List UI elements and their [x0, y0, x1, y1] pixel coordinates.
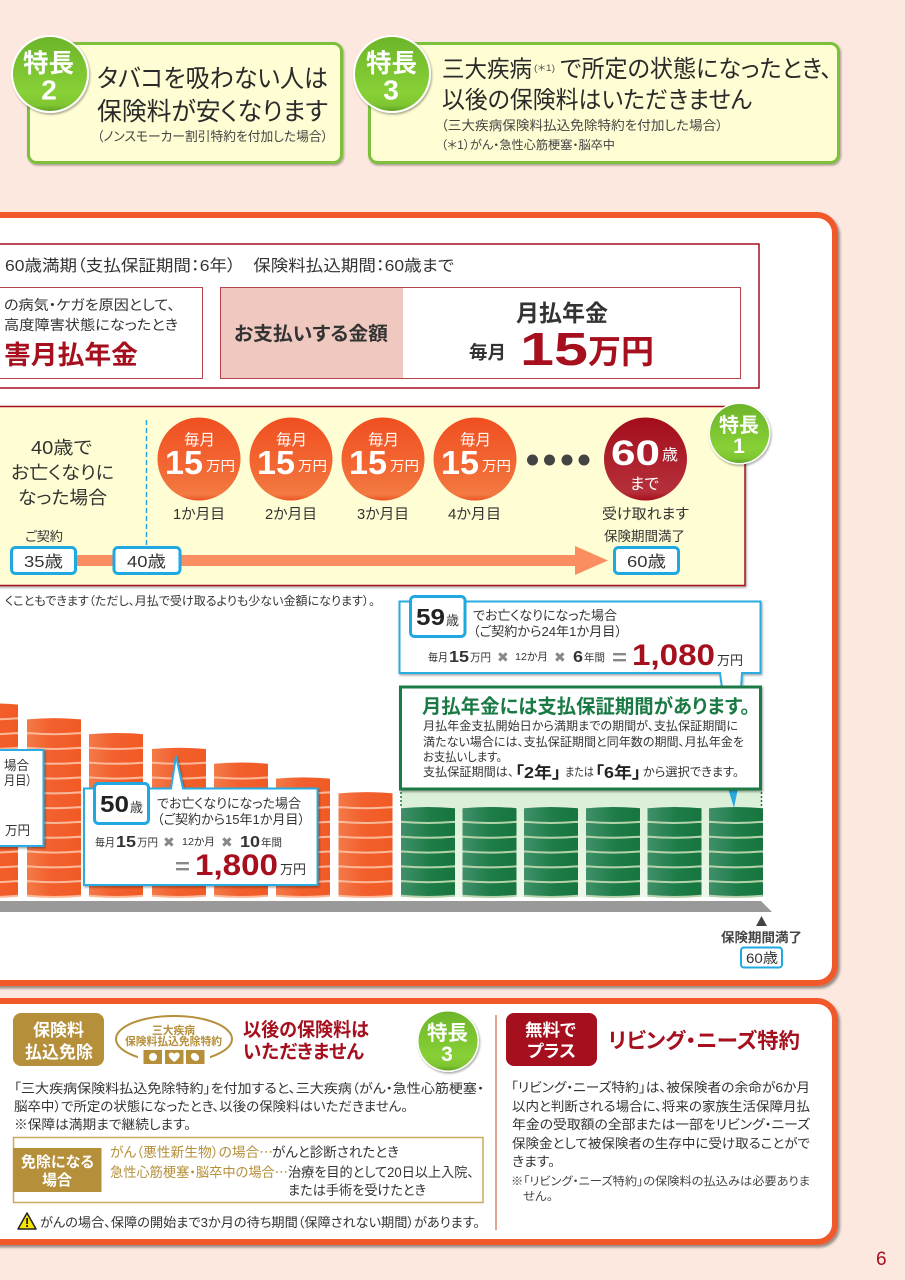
text: lump sum note: くこともできます（ただし、月払で受け取るよりも少ない金額になります）。 [5, 594, 375, 608]
panel: payment amount: 万円 [588, 333, 654, 370]
text: formula 50: 10 [240, 834, 260, 851]
callout: age 59 [400, 596, 760, 688]
heading: feature 3 text: 以後の保険料はいただきません [442, 87, 752, 114]
icon: coin month 2: 毎月 [276, 431, 307, 449]
text: formula 59: 6 [573, 649, 583, 666]
text: waiver description [14, 1081, 484, 1132]
orange stacks [0, 703, 392, 897]
icon: coin month 1 [158, 418, 240, 500]
icon: badge feature 3 [353, 35, 431, 113]
panel: guarantee period [400, 687, 760, 808]
label: age 50 box [94, 784, 148, 824]
callout: partial left case: 月目） [4, 773, 32, 788]
text: formula 50: 15 [116, 834, 136, 851]
callout: partial left case: 万円 [5, 823, 30, 838]
text: month labels: 1か月目 [173, 506, 225, 523]
text: scenario: 40歳で [31, 438, 92, 458]
heading: premium waiver: 以後の保険料は [243, 1019, 369, 1041]
icon: coin month 3: 万円 [390, 458, 419, 474]
icon: coin month 2 [250, 418, 332, 500]
badge: free add-on: 無料で [525, 1021, 576, 1040]
label: age 59 box: 歳 [446, 613, 459, 628]
icon: until age 60: まで [630, 476, 659, 493]
panel: guarantee period: から選択できます。 [643, 765, 739, 779]
icon: coin month 3 [342, 418, 424, 500]
panel: waiver conditions: 治療を目的として20日以上入院、 [288, 1165, 474, 1180]
icon: until age 60 [604, 418, 687, 500]
icon: badge feature 3: 特長 [427, 1022, 468, 1045]
panel: living needs rider [506, 1013, 811, 1203]
icon: rider logo oval [116, 1016, 232, 1066]
heading: premium waiver: いただきません [243, 1041, 365, 1063]
callout: age 59: でお亡くなりになった場合 [473, 608, 617, 623]
heading: feature 2 text [97, 65, 328, 144]
label: age 59 box [410, 596, 465, 636]
panel: payment amount: 15 [520, 323, 588, 375]
text: total 1800: 1,800 [195, 849, 278, 882]
heading: feature 2 text: タバコを吸わない人は [97, 65, 328, 93]
callout: age 50: （ご契約から15年1か月目） [157, 812, 305, 827]
icon: coin month 4: 15 [441, 444, 479, 481]
panel: payment timeline [0, 406, 745, 586]
icon: coin month 4 [434, 418, 516, 500]
text: living needs description: 「リビング・ニーズ特約」は、被保険者の余命が6か月 [511, 1080, 810, 1095]
text: month labels: 3か月目 [357, 506, 409, 523]
icon: coin month 1: 15 [165, 444, 203, 481]
text: living needs note: せん。 [523, 1190, 553, 1203]
text: formula 50: 12か月 [182, 836, 215, 848]
heading: feature 3 text: で所定の状態になったとき、 [560, 56, 832, 83]
text: total 1800: 万円 [280, 862, 306, 877]
panel: waiver conditions: がん（悪性新生物）の場合⋯ [110, 1145, 273, 1160]
text: formula 50: 年間 [261, 836, 282, 849]
icon: coin month 3: 毎月 [368, 431, 399, 449]
badge: free add-on: プラス [527, 1042, 576, 1061]
label: age 60: 60歳 [627, 553, 666, 571]
chart: declining benefit stacks [0, 703, 772, 912]
text: formula 59: 年間 [584, 651, 605, 664]
text: formula 50: 毎月 [95, 836, 115, 849]
text: total 1800 [175, 849, 306, 882]
icon: badge feature 3: 3 [441, 1043, 453, 1066]
text: formula 59: 15 [449, 649, 469, 666]
text: month labels: 受け取れます [602, 506, 689, 523]
text: month labels: 2か月目 [265, 506, 317, 523]
text: plan conditions: 60歳満期（支払保証期間：6年） 保険料払込期間：60歳まで [5, 257, 454, 275]
icon: badge feature 1 [708, 402, 770, 464]
panel: guarantee period: 「6年」 [595, 763, 641, 782]
heading: feature 3 text [441, 56, 832, 152]
panel: plan summary [0, 244, 759, 388]
badge: free add-on [506, 1013, 597, 1066]
panel: waiver conditions: 場合 [42, 1172, 72, 1189]
arrow: timeline [70, 546, 608, 575]
panel: guarantee period: 月払年金には支払保証期間があります。 [422, 695, 750, 718]
icon: coin month 1: 万円 [206, 458, 235, 474]
panel: waiver conditions: 急性心筋梗塞・脳卒中の場合⋯ [110, 1164, 288, 1180]
heading: feature 3 text: (＊1) [534, 63, 555, 73]
label: age 50 box: 歳 [130, 800, 143, 815]
icon: coin month 2: 万円 [298, 458, 327, 474]
text: scenario: お亡くなりに [11, 463, 114, 483]
panel: guarantee period: お支払いします。 [423, 750, 502, 764]
panel: waiver conditions [13, 1138, 483, 1202]
icon: warning [18, 1213, 36, 1229]
text: living needs description: 以内と判断される場合に、将来の家族生活保障月払 [512, 1099, 810, 1114]
panel: guarantee period: または [565, 765, 594, 779]
heading: feature 3 text: 三大疾病 [442, 56, 532, 82]
text: waiver description: ※保障は満期まで継続します。 [14, 1117, 191, 1132]
text: formula 59: 万円 [470, 652, 491, 664]
heading: feature 2 text: 保険料が安くなります [97, 98, 328, 126]
callout: age 59: （ご契約から24年1か月目） [473, 624, 622, 639]
icon: coin month 4: 毎月 [460, 431, 491, 449]
text: formula 59: ✖ [497, 649, 509, 665]
icon: badge feature 3: 3 [383, 74, 399, 106]
label: age 40 [114, 548, 180, 574]
panel: payment condition: 高度障害状態になったとき [4, 317, 178, 333]
icon: coin month 4: 万円 [482, 458, 511, 474]
panel: main benefit panel [0, 215, 835, 983]
text: formula 59: 12か月 [515, 651, 548, 663]
callout: age 50 [84, 756, 318, 885]
panel: guarantee period: 「2年」 [515, 763, 561, 782]
icon: badge feature 2 [11, 35, 89, 113]
green stacks [401, 807, 763, 897]
label: age 40: 40歳 [127, 553, 166, 571]
panel: payment condition: 害月払年金 [4, 340, 138, 370]
heading: premium waiver [243, 1019, 369, 1063]
label: age 59 box: 59 [416, 604, 445, 630]
icon: coin month 1: 毎月 [184, 431, 215, 449]
panel: feature 2 [28, 44, 342, 162]
panel: bottom riders [0, 1001, 835, 1242]
panel: feature 3 [370, 44, 838, 162]
text: total 1080 [612, 639, 743, 672]
text: living needs note [511, 1174, 810, 1203]
text: living needs description [511, 1080, 811, 1169]
label: age 50 box: 50 [100, 791, 129, 817]
panel: waiver conditions: または手術を受けたとき [288, 1183, 426, 1198]
badge: premium waiver: 払込免除 [25, 1043, 93, 1062]
panel: payment amount: お支払いする金額 [234, 323, 388, 345]
text: formula 50: 万円 [137, 837, 158, 849]
label: age 35 [12, 548, 76, 574]
panel: guarantee period: 満たない場合には、支払保証期間と同年数の期間、月払年金を [423, 735, 744, 749]
text: total 1080: 万円 [717, 653, 743, 668]
text: living needs note: ※「リビング・ニーズ特約」の保険料の払込みは必要ありま [511, 1174, 810, 1188]
label: age 60 [614, 548, 678, 574]
text: total 1800: = [175, 854, 190, 879]
badge: premium waiver: 保険料 [33, 1021, 84, 1040]
text: total 1080: = [612, 645, 627, 670]
text: month labels: 保険期間満了 [604, 529, 685, 544]
text: month labels: ご契約 [25, 529, 63, 544]
icon: badge feature 2: 2 [41, 74, 57, 106]
panel: payment condition [0, 288, 202, 378]
panel: payment condition: の病気・ケガを原因として、 [4, 297, 175, 313]
heading: feature 2 text: （ノンスモーカー割引特約を付加した場合） [97, 129, 328, 144]
text: formula 59 [428, 649, 605, 666]
callout: partial left case [0, 750, 44, 846]
panel: waiver conditions: がんと診断されたとき [272, 1145, 399, 1160]
icon: badge feature 3: 特長 [366, 50, 417, 78]
label: policy end marker: 60歳 [746, 950, 778, 966]
icon: until age 60: 歳 [662, 446, 678, 464]
panel: payment amount [220, 288, 740, 378]
text: month labels: 4か月目 [448, 506, 501, 523]
icon: badge feature 3 [417, 1010, 479, 1072]
callout: partial left case: 場合 [4, 758, 29, 773]
text: living needs description: 保険金として被保険者の生存中に受け取ることがで [512, 1136, 811, 1151]
label: policy end marker: 保険期間満了 [721, 930, 802, 945]
green guarantee background [401, 790, 762, 897]
panel: payment amount: 毎月 [469, 342, 506, 363]
text: formula 59: 毎月 [428, 651, 448, 664]
heading: feature 3 text: （三大疾病保険料払込免除特約を付加した場合） [441, 118, 723, 133]
icon: rider logo oval: 三大疾病 [152, 1023, 195, 1037]
text: month labels [25, 506, 689, 544]
icon: coin month 2: 15 [257, 444, 295, 481]
badge: premium waiver [13, 1013, 104, 1066]
panel: guarantee period: 支払保証期間は、 [423, 765, 514, 779]
text: living needs description: 年金の受取額の全部または一部をリビング・ニーズ [512, 1117, 811, 1132]
icon: until age 60: 60 [611, 434, 660, 473]
text: formula 50 [95, 834, 282, 851]
label: age 35: 35歳 [24, 553, 63, 571]
panel: premium waiver [13, 1010, 484, 1230]
icon: badge feature 2: 特長 [23, 50, 74, 78]
icon: coin month 3: 15 [349, 444, 387, 481]
page number: 6 [876, 1249, 887, 1270]
panel: payment amount: 月払年金 [516, 300, 608, 326]
text: warning note: がんの場合、保障の開始まで3か月の待ち期間（保障されない期間）があります。 [40, 1215, 480, 1230]
label: policy end marker [721, 916, 802, 968]
panel: waiver conditions: 免除になる [21, 1153, 94, 1171]
heading: living needs: リビング・ニーズ特約 [608, 1029, 800, 1053]
text: living needs description: きます。 [512, 1154, 555, 1169]
icon: badge feature 1: 1 [733, 435, 745, 458]
text: formula 59: ✖ [554, 649, 566, 665]
text: waiver description: 脳卒中）で所定の状態になったとき、以後の保険料はいただきません。 [14, 1099, 408, 1114]
text: scenario: なった場合 [18, 488, 107, 508]
text: total 1080: 1,080 [632, 639, 715, 672]
ground bar [0, 901, 772, 912]
text: scenario [11, 438, 114, 508]
icon: rider logo oval: 保険料払込免除特約 [125, 1034, 222, 1048]
text: waiver description: 「三大疾病保険料払込免除特約」を付加すると、三大疾病（がん・急性心筋梗塞・ [14, 1081, 484, 1096]
text: formula 50: ✖ [163, 834, 175, 850]
text: formula 50: ✖ [221, 834, 233, 850]
panel: guarantee period: 月払年金支払開始日から満期までの期間が、支払保証期間に [423, 719, 738, 733]
icon: continuation dots [527, 454, 590, 466]
icon: badge feature 1: 特長 [719, 414, 759, 437]
callout: age 50: でお亡くなりになった場合 [157, 796, 301, 811]
heading: feature 3 text: （＊1）がん・急性心筋梗塞・脳卒中 [441, 137, 615, 152]
